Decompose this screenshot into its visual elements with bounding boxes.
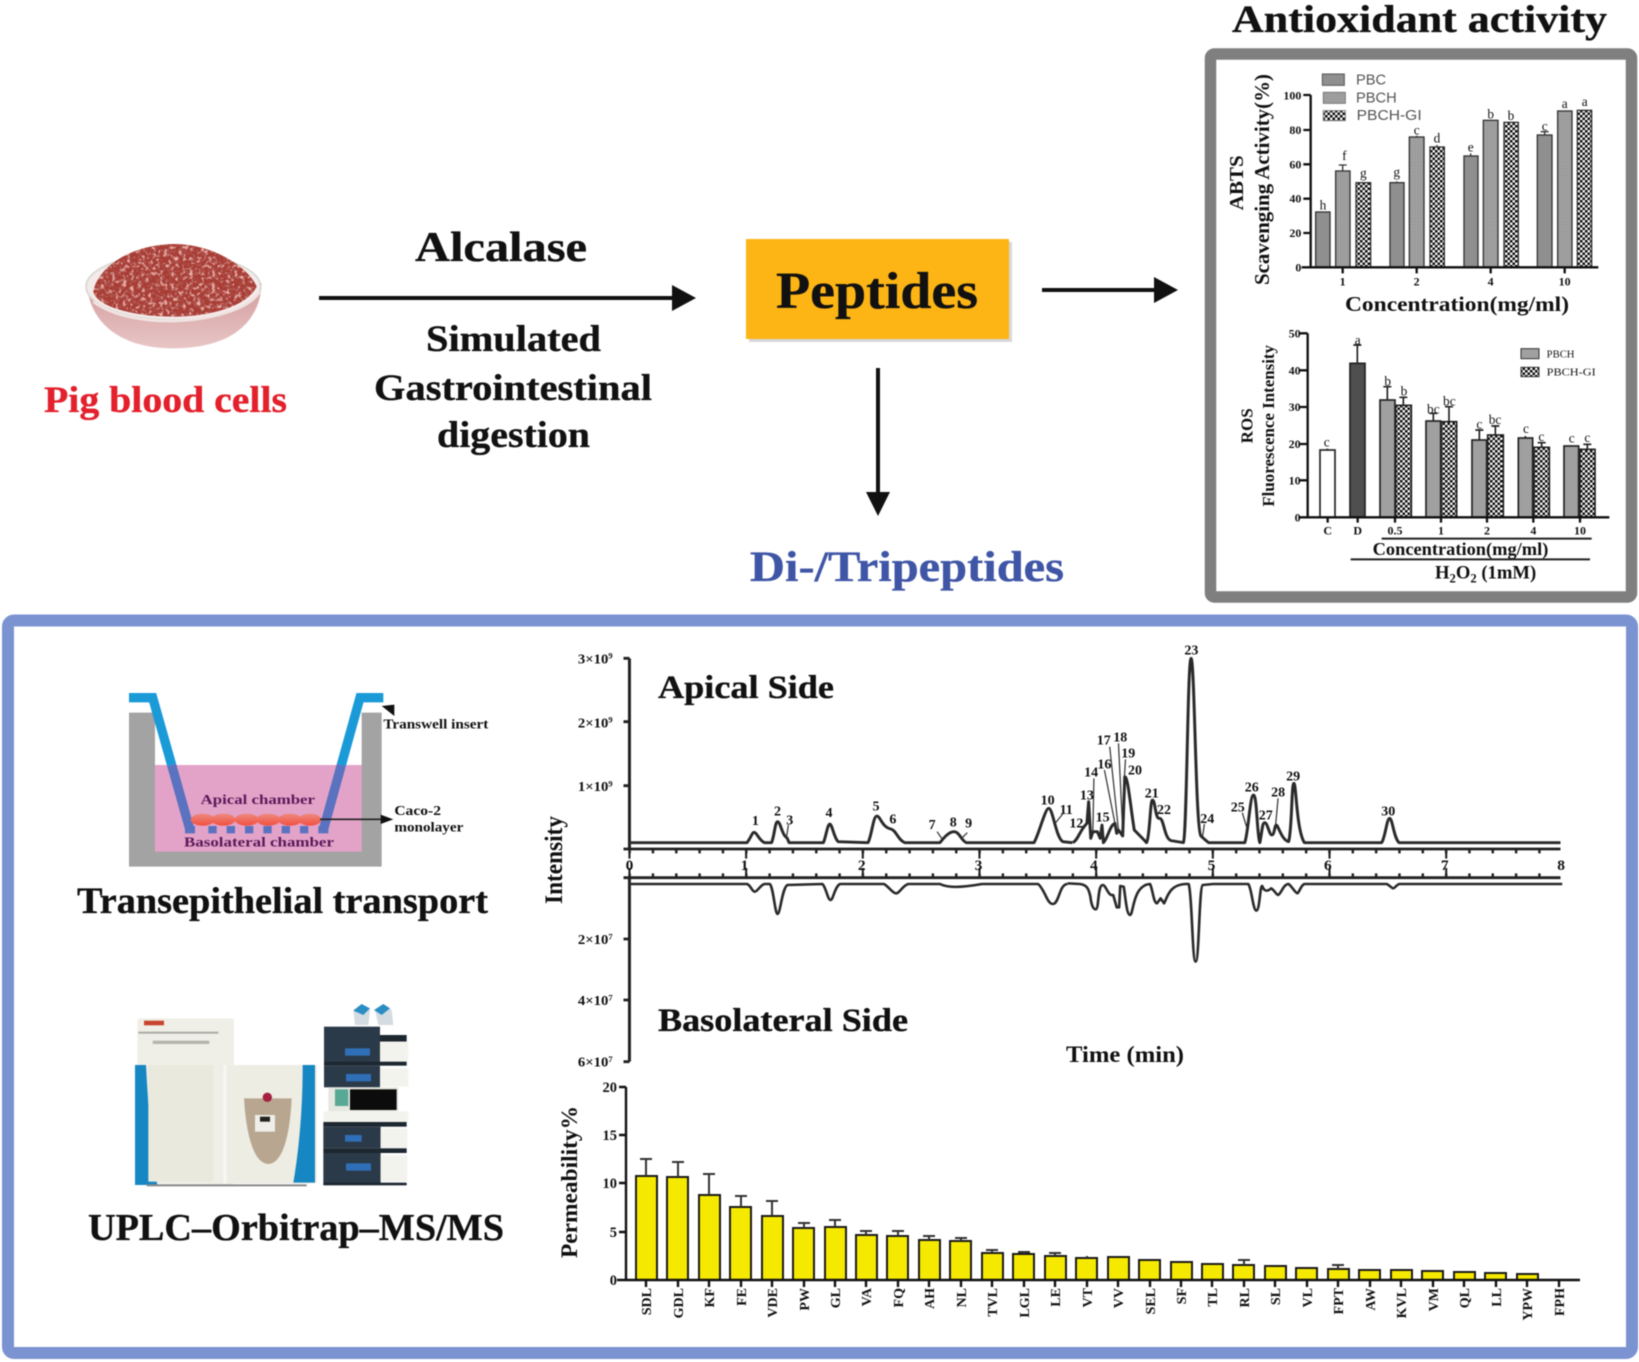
axis labels: ROS: 10 xyxy=(1289,473,1301,487)
y tick labels: chromatogram: 4×10 xyxy=(578,993,608,1009)
axes: chromatogram xyxy=(623,658,1562,1062)
axis labels: ABTS: 100 xyxy=(1283,88,1301,102)
UPLC stack xyxy=(323,1004,408,1185)
significance letters: ABTS: a xyxy=(1562,96,1568,111)
y tick labels: permeability: 15 xyxy=(602,1128,617,1144)
arrow: transwell insert xyxy=(382,705,394,716)
peptide labels: VT xyxy=(1081,1287,1096,1307)
chart: ROS fluorescence intensity xyxy=(1238,326,1609,586)
peptide labels: YPW xyxy=(1521,1288,1536,1321)
peptide labels: AW xyxy=(1364,1288,1379,1311)
label: di-/tripeptides: Di-/Tripeptides xyxy=(750,544,1064,591)
legend: ABTS: PBCH-GI xyxy=(1357,108,1422,124)
y tick labels: chromatogram: 2×10 xyxy=(578,932,608,948)
significance letters: ROS: bc xyxy=(1427,401,1440,416)
peak numbers xyxy=(752,643,1395,832)
y tick labels: chromatogram: 7 xyxy=(608,994,613,1002)
legend: ROS xyxy=(1521,349,1596,379)
diagram: transwell insert xyxy=(129,698,489,867)
y tick labels: chromatogram: 7 xyxy=(608,933,613,941)
chart: mirrored chromatogram xyxy=(578,643,1566,1071)
peak numbers: 29 xyxy=(1286,769,1300,783)
x tick labels: time: 7 xyxy=(1441,858,1449,874)
bars: ROS xyxy=(1320,345,1595,517)
grouping lines: ROS xyxy=(1351,539,1592,559)
peptide labels: LL xyxy=(1490,1288,1505,1307)
icon: UPLC Orbitrap instrument xyxy=(135,1004,408,1186)
icon: dish of pig blood cell powder xyxy=(86,244,262,348)
x tick labels: time: 3 xyxy=(975,858,983,874)
significance letters: ROS: c xyxy=(1523,421,1529,436)
label: simulated gastrointestinal digestion: Simulated xyxy=(426,319,601,360)
significance letters: ROS: c xyxy=(1324,435,1330,450)
x tick labels: time: 6 xyxy=(1324,858,1332,874)
y tick labels: permeability: 5 xyxy=(610,1225,617,1241)
peak numbers: 16 xyxy=(1097,757,1112,772)
legend: ABTS: PBC xyxy=(1356,73,1387,89)
axis labels: ABTS: 60 xyxy=(1289,157,1301,171)
peak numbers: 9 xyxy=(965,816,972,830)
x tick labels: time: 2 xyxy=(858,858,866,874)
significance letters: ROS: a xyxy=(1355,332,1361,347)
y axis title: ABTS scavenging activity: ABTS xyxy=(1226,155,1248,210)
medium xyxy=(155,765,362,852)
arrow: peptides to di-/tripeptides xyxy=(866,368,890,516)
x axis title: ABTS concentration: Concentration(mg/ml) xyxy=(1345,292,1569,316)
trace: basolateral side xyxy=(629,883,1562,962)
y tick labels: chromatogram: 9 xyxy=(608,652,613,661)
peptide labels: VA xyxy=(860,1287,875,1306)
label: transepithelial transport: Transepithelial transport xyxy=(77,881,489,922)
y tick labels: permeability xyxy=(602,1080,617,1289)
chart: ROS fluorescence intensity: 4 xyxy=(1530,524,1536,538)
callout labels: Caco-2 xyxy=(394,803,441,818)
significance letters: ABTS: c xyxy=(1542,119,1548,134)
peak numbers: 23 xyxy=(1184,643,1199,658)
peak numbers: 24 xyxy=(1200,811,1214,826)
label: pig blood cells: Pig blood cells xyxy=(44,380,287,421)
peak numbers: 1 xyxy=(752,813,759,828)
peak numbers: 8 xyxy=(950,815,957,830)
peptide labels: VL xyxy=(1301,1288,1316,1307)
peak numbers: 30 xyxy=(1381,804,1395,818)
chart: ABTS scavenging activity: 4 xyxy=(1488,274,1494,288)
peak numbers: 10 xyxy=(1041,793,1055,808)
peptide labels: PW xyxy=(798,1288,813,1311)
callout labels: Transwell insert xyxy=(383,716,489,731)
peak numbers: 13 xyxy=(1080,788,1094,803)
axis labels: ROS: 40 xyxy=(1289,363,1301,377)
peak numbers: 17 xyxy=(1097,733,1111,748)
axes: ROS xyxy=(1298,333,1609,523)
significance letters: ABTS: f xyxy=(1342,148,1347,163)
axes: permeability xyxy=(617,1087,1580,1287)
peak numbers: 28 xyxy=(1271,785,1285,799)
axis labels: ROS: 20 xyxy=(1289,437,1301,451)
peak numbers: 12 xyxy=(1069,816,1084,830)
heading: apical side: Apical Side xyxy=(658,670,834,706)
bars: ABTS xyxy=(1316,110,1592,267)
significance letters: ABTS: g xyxy=(1360,165,1367,180)
label: simulated gastrointestinal digestion: Gastrointestinal xyxy=(374,368,652,409)
chamber labels: Apical chamber xyxy=(201,792,315,807)
chart: ABTS scavenging activity xyxy=(1226,73,1598,288)
insert xyxy=(129,698,383,830)
peptide labels: GL xyxy=(829,1288,844,1308)
arrow: peptides to antioxidant activity xyxy=(1042,277,1178,303)
peptide labels: SF xyxy=(1175,1288,1190,1304)
significance letters: ABTS: c xyxy=(1414,122,1420,137)
significance letters: ROS: c xyxy=(1538,429,1544,444)
peak numbers: 26 xyxy=(1245,780,1259,794)
x tick labels: time: 1 xyxy=(741,858,748,874)
axis labels: ROS: 30 xyxy=(1289,400,1301,414)
peptide labels: VM xyxy=(1427,1288,1442,1311)
peak numbers: 22 xyxy=(1157,802,1171,817)
peptide labels: VDE xyxy=(766,1288,781,1318)
panel: antioxidant activity frame xyxy=(1210,54,1632,597)
label: H2O2 1mM: O xyxy=(1456,563,1470,584)
peptide labels: RL xyxy=(1238,1288,1253,1307)
peptide labels: FQ xyxy=(892,1288,907,1307)
chart: ROS fluorescence intensity: C xyxy=(1323,524,1332,538)
significance letters: ABTS xyxy=(1320,94,1588,212)
x tick labels: time: 8 xyxy=(1557,858,1566,874)
x tick labels: time xyxy=(626,858,1566,874)
peptide labels: GDL xyxy=(672,1288,687,1318)
chart: ROS fluorescence intensity: 2 xyxy=(1484,524,1490,538)
significance letters: ABTS: b xyxy=(1487,107,1494,122)
label: H2O2 1mM: H xyxy=(1435,563,1450,584)
axis labels: ABTS xyxy=(1283,88,1301,274)
peak numbers: 19 xyxy=(1121,746,1135,760)
peptide labels: TVL xyxy=(986,1288,1001,1317)
significance letters: ROS xyxy=(1324,332,1590,450)
peak numbers: 25 xyxy=(1231,800,1245,814)
callout labels xyxy=(383,716,489,835)
well wall xyxy=(129,713,382,867)
legend: ROS: PBCH xyxy=(1547,350,1575,361)
peptide labels: VV xyxy=(1112,1288,1127,1308)
y tick labels: permeability: 0 xyxy=(610,1273,617,1289)
y tick labels: chromatogram: 3×10 xyxy=(578,652,608,667)
peptide labels: FE xyxy=(735,1288,750,1306)
peptide labels: LE xyxy=(1049,1288,1064,1307)
axis labels: ABTS: 20 xyxy=(1289,226,1301,240)
peptide labels: KF xyxy=(703,1288,718,1307)
mass spectrometer cabinet xyxy=(135,1018,317,1186)
label: H2O2 1mM: 2 xyxy=(1470,572,1477,586)
y axis title: permeability: Permeability% xyxy=(557,1106,582,1258)
axis title: intensity: Intensity xyxy=(541,816,568,904)
peak leader lines xyxy=(787,743,1278,838)
significance letters: ABTS: e xyxy=(1468,139,1474,154)
peak numbers: 27 xyxy=(1259,808,1273,823)
Caco-2 cells xyxy=(191,814,321,826)
peak numbers: 21 xyxy=(1145,786,1159,800)
peak numbers: 5 xyxy=(873,799,880,813)
significance letters: ROS: c xyxy=(1569,430,1575,445)
callout labels: monolayer xyxy=(394,820,463,835)
peptide labels: FPH xyxy=(1553,1288,1568,1316)
chart: ROS fluorescence intensity: 10 xyxy=(1574,524,1586,538)
significance letters: ABTS: a xyxy=(1582,94,1588,109)
peptide labels: NL xyxy=(955,1288,970,1307)
x tick labels: time: 4 xyxy=(1090,858,1098,874)
legend: ABTS xyxy=(1322,73,1422,124)
y tick labels: chromatogram: 1×10 xyxy=(578,779,608,795)
significance letters: ROS: c xyxy=(1584,430,1590,445)
arrow: Caco-2 monolayer xyxy=(320,815,393,824)
peptide labels: LGL xyxy=(1018,1288,1033,1318)
significance letters: ROS: bc xyxy=(1443,394,1456,409)
axis labels: ROS xyxy=(1289,326,1301,524)
peak numbers: 11 xyxy=(1060,802,1073,817)
axis title: time: Time (min) xyxy=(1066,1042,1184,1067)
peak numbers: 2 xyxy=(774,804,781,818)
axis labels: ROS: 0 xyxy=(1295,510,1301,524)
axis labels: ABTS: 40 xyxy=(1289,192,1301,206)
axis labels: ABTS: 0 xyxy=(1295,260,1301,274)
peak numbers: 18 xyxy=(1113,730,1127,744)
y tick labels: permeability: 20 xyxy=(602,1080,617,1096)
y axis title: ROS fluorescence intensity xyxy=(1238,344,1278,507)
chart: ROS fluorescence intensity: 0.5 xyxy=(1388,524,1402,538)
peptide labels: TL xyxy=(1206,1288,1221,1307)
legend: ROS: PBCH-GI xyxy=(1547,368,1596,379)
peptide labels: FPT xyxy=(1332,1287,1347,1314)
peptide labels: QL xyxy=(1458,1288,1473,1308)
label: simulated gastrointestinal digestion xyxy=(374,319,652,456)
y tick labels: chromatogram: 6×10 xyxy=(578,1055,608,1071)
x axis title: ROS concentration: Concentration(mg/ml) xyxy=(1373,539,1548,560)
peak numbers: 3 xyxy=(786,813,793,827)
peptide labels: SL xyxy=(1269,1288,1284,1305)
error bars: permeability xyxy=(640,1159,1344,1269)
peak numbers: 4 xyxy=(826,805,833,820)
trace: apical side xyxy=(629,658,1560,843)
heading: basolateral side: Basolateral Side xyxy=(658,1003,908,1039)
axis labels: ROS: 50 xyxy=(1289,326,1301,340)
significance letters: ROS: b xyxy=(1401,384,1408,399)
porous membrane xyxy=(185,826,328,833)
y tick labels: chromatogram: 9 xyxy=(608,780,613,788)
y axis title: ABTS scavenging activity: Scavenging Activity(%) xyxy=(1252,74,1274,285)
peptide labels xyxy=(640,1287,1568,1321)
y axis title: ABTS scavenging activity xyxy=(1226,74,1274,285)
peak numbers: 7 xyxy=(929,817,936,832)
y tick labels: chromatogram: 2×10 xyxy=(578,716,608,731)
significance letters: ABTS: d xyxy=(1434,131,1441,146)
chart: ROS fluorescence intensity: D xyxy=(1353,524,1362,538)
peptide labels: SDL xyxy=(640,1288,655,1315)
peptide labels: SEL xyxy=(1144,1288,1159,1314)
y axis title: ROS fluorescence intensity: ROS xyxy=(1238,408,1257,443)
label: alcalase: Alcalase xyxy=(415,225,587,271)
x tick labels: time: 5 xyxy=(1208,858,1215,874)
x tick labels: time: 0 xyxy=(626,858,633,874)
legend: ABTS: PBCH xyxy=(1356,91,1397,107)
chart: ROS fluorescence intensity: 1 xyxy=(1438,524,1444,538)
y tick labels: chromatogram: 7 xyxy=(608,1055,613,1064)
significance letters: ABTS: b xyxy=(1508,108,1515,123)
panel: transport and peptide identification xyxy=(8,620,1632,1353)
chart: permeability bars xyxy=(557,1080,1580,1321)
arrow: pig blood cells to peptides xyxy=(319,285,696,311)
peptide labels: KVL xyxy=(1395,1288,1410,1318)
significance letters: ROS: bc xyxy=(1489,412,1501,427)
significance letters: ABTS: h xyxy=(1320,197,1327,212)
peak numbers: 15 xyxy=(1096,810,1110,824)
chart: ABTS scavenging activity: 10 xyxy=(1559,274,1571,288)
bars: permeability xyxy=(636,1176,1538,1280)
y tick labels: chromatogram xyxy=(578,652,613,1071)
box: peptides xyxy=(746,239,1012,342)
chamber labels xyxy=(184,792,334,850)
label: UPLC-Orbitrap-MS/MS: UPLC–Orbitrap–MS/MS xyxy=(88,1207,504,1249)
peptide labels: AH xyxy=(923,1288,938,1309)
label: H2O2 1mM: 2 xyxy=(1450,572,1456,586)
peak numbers: 14 xyxy=(1084,765,1098,779)
axes: ABTS xyxy=(1302,95,1598,273)
y tick labels: permeability: 10 xyxy=(602,1176,617,1192)
chart: ABTS scavenging activity: 2 xyxy=(1414,274,1420,288)
axis labels: ABTS: 80 xyxy=(1289,123,1301,137)
label: simulated gastrointestinal digestion: digestion xyxy=(437,415,590,456)
label: H2O2 1mM: (1mM) xyxy=(1477,563,1536,584)
y tick labels: chromatogram: 9 xyxy=(608,716,613,725)
significance letters: ROS: b xyxy=(1384,373,1391,388)
peak numbers: 6 xyxy=(889,812,897,826)
box: peptides: Peptides xyxy=(776,263,978,320)
y axis title: ROS fluorescence intensity: Fluorescence Intensity xyxy=(1259,344,1278,507)
peak numbers: 20 xyxy=(1128,763,1142,778)
significance letters: ABTS: g xyxy=(1393,165,1400,180)
chart: ABTS scavenging activity: 1 xyxy=(1340,274,1346,288)
chamber labels: Basolateral chamber xyxy=(184,835,334,850)
significance letters: ROS: c xyxy=(1476,416,1482,431)
